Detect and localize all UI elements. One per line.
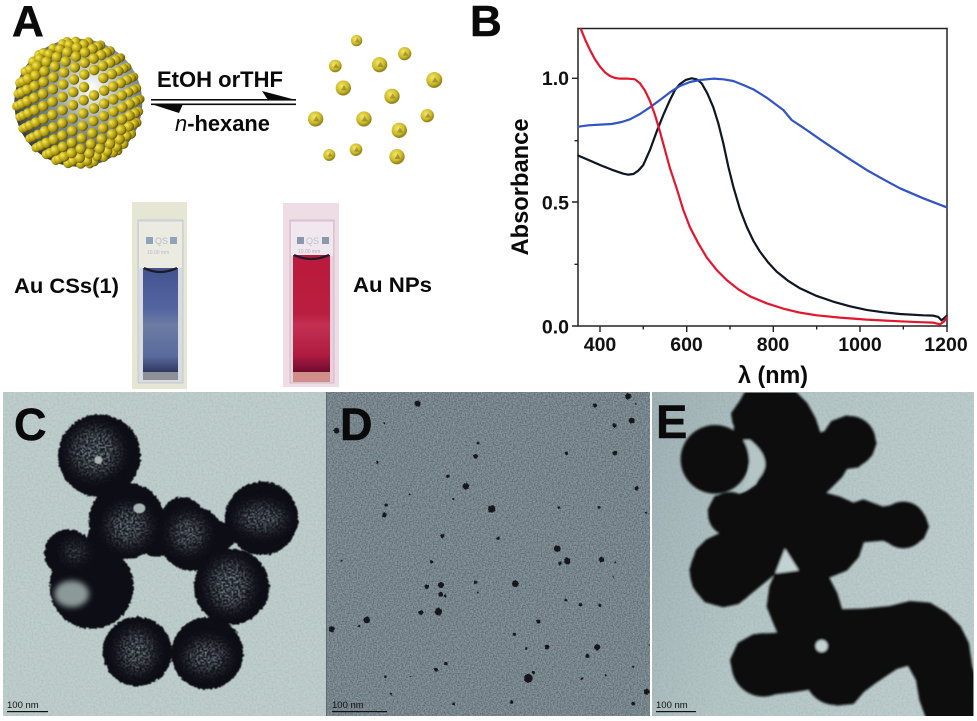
- photo: blue cuvette: QS: [155, 236, 168, 246]
- x axis tick labels: 1000: [838, 334, 882, 356]
- axis ticks: [572, 78, 947, 332]
- x axis tick labels: 800: [757, 334, 789, 356]
- illustration: gold colloidal sphere: [0, 16, 165, 189]
- photo: blue cuvette: [132, 202, 187, 389]
- panel: D TEM image: [327, 392, 650, 716]
- y axis tick labels: 0.0: [542, 316, 569, 338]
- TEM background E: [652, 392, 974, 716]
- y axis title: Absorbance: [507, 118, 534, 256]
- y axis tick labels: 1.0: [542, 68, 569, 90]
- panel: C TEM image: [3, 392, 328, 716]
- gaps between particles E: [775, 549, 828, 652]
- x axis tick labels: 600: [670, 334, 703, 356]
- scale bar E: 100 nm: [656, 700, 688, 711]
- photo: red cuvette: QS: [306, 236, 319, 246]
- x axis title: λ (nm): [738, 362, 808, 389]
- scale bar D: 100 nm: [332, 700, 364, 711]
- x axis tick labels: 1200: [924, 334, 968, 356]
- panel letter C: C: [14, 399, 46, 450]
- lighter regions C: [54, 456, 145, 607]
- y axis tick labels: [542, 68, 569, 338]
- equilibrium arrows: [151, 91, 296, 113]
- panel letter D: D: [340, 399, 372, 450]
- curve: blue: [578, 79, 947, 207]
- y axis tick labels: 0.5: [542, 192, 569, 214]
- TEM background C: [3, 392, 326, 716]
- plot frame: [578, 28, 947, 326]
- label: n-hexane: n-hexane: [175, 111, 270, 136]
- crescent gap E: [741, 440, 765, 492]
- label: Au CSs(1): Au CSs(1): [14, 274, 119, 298]
- x axis tick labels: 400: [584, 334, 616, 356]
- curves: [578, 29, 947, 324]
- aggregated particles E: [681, 390, 975, 718]
- curve: black: [578, 78, 947, 320]
- illustration: dispersed gold nanoparticles: [308, 35, 442, 164]
- scale bar C: [7, 700, 48, 712]
- rounded lobes E: [681, 390, 927, 705]
- x axis tick labels: [584, 334, 968, 356]
- scale bar C: 100 nm: [7, 700, 39, 711]
- nanoparticle cluster C: [44, 414, 298, 689]
- silhouette E: [690, 390, 975, 718]
- curve: red: [581, 29, 947, 324]
- panel: B absorbance chart: [470, 0, 968, 389]
- label: EtOH or THF: EtOH orTHF: [157, 67, 283, 92]
- panel letter E: E: [656, 395, 687, 448]
- label: Au NPs: Au NPs: [353, 273, 432, 297]
- TEM background D: [327, 392, 650, 716]
- scale bar D: [332, 700, 387, 712]
- panel: E TEM image: [652, 390, 975, 718]
- panel: A scheme: [0, 0, 442, 389]
- photo: red cuvette: 10.00 mm: [298, 249, 320, 255]
- dispersed nanoparticles D: [329, 393, 650, 705]
- photo: red cuvette: [283, 203, 339, 387]
- photo: blue cuvette: 10.00 mm: [147, 250, 169, 256]
